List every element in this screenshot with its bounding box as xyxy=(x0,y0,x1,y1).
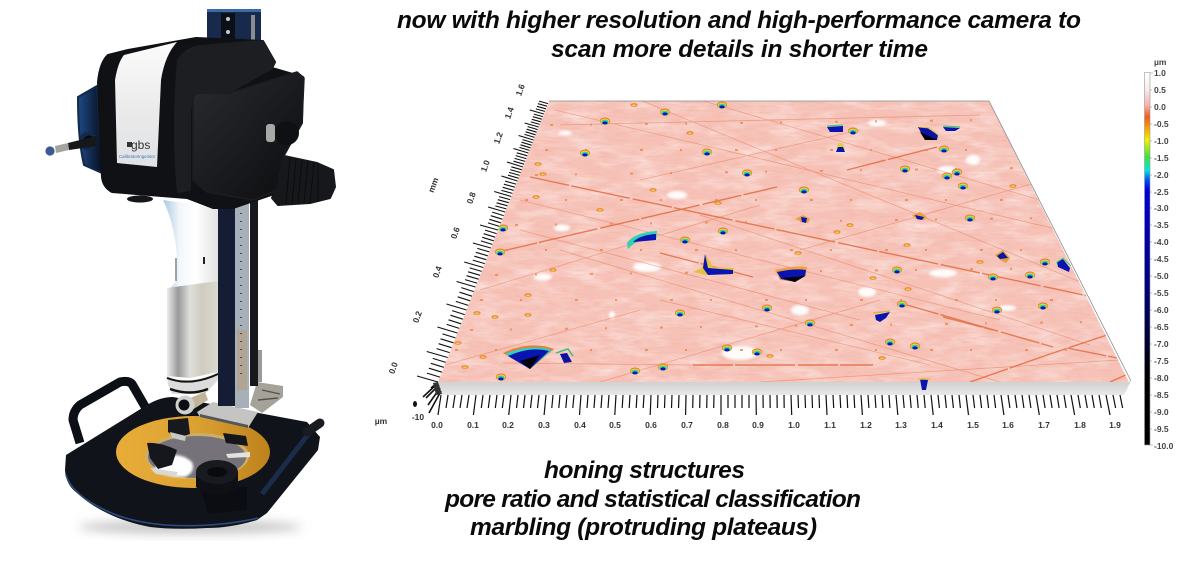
y axis labels: 0.4 xyxy=(430,264,444,279)
colour scale legend: -8.5 xyxy=(1154,390,1169,400)
title: top caption: now with higher resolution and high-performance camera to xyxy=(397,7,1081,34)
colour scale legend: -7.0 xyxy=(1154,339,1169,349)
icon: stage mechanics xyxy=(197,350,283,428)
colour scale legend: 0.0 xyxy=(1154,102,1166,112)
colour scale legend: -9.5 xyxy=(1154,424,1169,434)
icon: base plate xyxy=(65,397,320,529)
z axis xyxy=(375,382,442,426)
x axis labels: 1.2 xyxy=(860,420,872,430)
colour scale legend: -5.0 xyxy=(1154,271,1169,281)
x axis labels xyxy=(431,420,1121,430)
x axis labels: 1.9 xyxy=(1109,420,1121,430)
icon: stage knob xyxy=(196,460,247,514)
orange specks xyxy=(455,120,1100,350)
y axis labels: 0.2 xyxy=(410,309,424,324)
x axis labels: 0.4 xyxy=(574,420,586,430)
colour scale legend: -10.0 xyxy=(1154,441,1174,451)
colour scale legend: -2.5 xyxy=(1154,187,1169,197)
caption: feature list: marbling (protruding plateaus) xyxy=(470,514,817,541)
x axis labels: 1.5 xyxy=(967,420,979,430)
colour scale legend: -6.0 xyxy=(1154,305,1169,315)
height map surface xyxy=(430,100,1135,385)
y axis labels: mm xyxy=(426,176,441,194)
icon: silver cylinder xyxy=(167,281,218,394)
colour scale legend: -3.5 xyxy=(1154,220,1169,230)
icon: top column xyxy=(207,9,261,45)
colour scale legend: -9.0 xyxy=(1154,407,1169,417)
icon: right housing box xyxy=(193,72,304,200)
colour scale legend: 1.0 xyxy=(1154,68,1166,78)
caption: feature list: honing structures xyxy=(544,457,745,484)
y axis labels: 0.6 xyxy=(448,225,462,240)
colour scale legend: -5.5 xyxy=(1154,288,1169,298)
icon: white panel with logo xyxy=(115,42,177,167)
x axis labels: 0.5 xyxy=(609,420,621,430)
colour scale legend xyxy=(1144,57,1174,451)
x axis labels: 0.1 xyxy=(467,420,479,430)
icon: main housing xyxy=(98,38,303,208)
title: top caption xyxy=(397,7,1081,63)
instrument: surface measuring device xyxy=(45,9,335,534)
scratch lines xyxy=(445,100,1128,382)
y axis labels xyxy=(386,82,527,375)
y axis labels: 0.8 xyxy=(464,190,478,205)
small pores xyxy=(454,102,1050,380)
icon: column and scale xyxy=(218,200,258,408)
colour scale legend: -6.5 xyxy=(1154,322,1169,332)
icon: white panel with logo: CalibratorIngenitor xyxy=(119,154,156,159)
x axis labels: 1.8 xyxy=(1074,420,1086,430)
icon: rod on left xyxy=(45,132,97,156)
y axis labels: 1.6 xyxy=(513,82,527,97)
x axis labels: 0.0 xyxy=(431,420,443,430)
x axis labels: 1.1 xyxy=(824,420,836,430)
white plateaus xyxy=(534,120,1016,360)
side band xyxy=(438,381,1131,395)
colour scale legend: µm xyxy=(1154,57,1167,67)
colour scale legend: -1.0 xyxy=(1154,136,1169,146)
y axis ticks xyxy=(417,101,548,382)
colour scale legend: -3.0 xyxy=(1154,203,1169,213)
colour scale legend: -2.0 xyxy=(1154,170,1169,180)
y axis labels: 1.0 xyxy=(478,158,492,173)
icon: underside foot xyxy=(127,196,153,202)
icon: left blue housing xyxy=(78,86,102,173)
x axis labels: 1.0 xyxy=(788,420,800,430)
large pores xyxy=(503,125,1071,369)
colour scale legend: -0.5 xyxy=(1154,119,1169,129)
colour scale legend: -1.5 xyxy=(1154,153,1169,163)
icon: neck xyxy=(163,200,218,292)
x axis labels: 0.7 xyxy=(681,420,693,430)
colour scale legend: 0.5 xyxy=(1154,85,1166,95)
icon: carry handle xyxy=(73,381,147,443)
colour scale legend: -8.0 xyxy=(1154,373,1169,383)
x axis labels: 0.3 xyxy=(538,420,550,430)
caption: feature list: pore ratio and statistical classification xyxy=(444,486,861,513)
x axis labels: 0.6 xyxy=(645,420,657,430)
colour scale legend: -7.5 xyxy=(1154,356,1169,366)
z axis: -10 xyxy=(412,412,424,422)
y axis labels: 1.4 xyxy=(502,105,516,120)
3D surface plot xyxy=(375,82,1135,430)
icon: focus knob xyxy=(272,156,335,205)
x axis labels: 1.6 xyxy=(1002,420,1014,430)
caption: feature list xyxy=(444,457,861,541)
z axis: µm xyxy=(375,416,388,426)
x axis ticks xyxy=(438,395,1123,415)
x axis labels: 1.3 xyxy=(895,420,907,430)
colour scale legend: -4.0 xyxy=(1154,237,1169,247)
x axis labels: 1.7 xyxy=(1038,420,1050,430)
x axis labels: 0.8 xyxy=(717,420,729,430)
x axis labels: 0.9 xyxy=(752,420,764,430)
icon: small side knob xyxy=(266,121,299,145)
colour scale legend: -4.5 xyxy=(1154,254,1169,264)
x axis labels: 0.2 xyxy=(502,420,514,430)
icon: white panel with logo: gbs xyxy=(131,138,150,152)
icon: front shell xyxy=(175,41,275,192)
y axis labels: 1.2 xyxy=(491,130,505,145)
x axis labels: 1.4 xyxy=(931,420,943,430)
icon: gold ring xyxy=(116,416,270,488)
edge outline xyxy=(549,101,1131,381)
pore on edge xyxy=(918,379,930,390)
icon: objective xyxy=(176,392,208,414)
y axis labels: 0.0 xyxy=(386,360,400,375)
title: top caption: scan more details in shorter time xyxy=(551,36,928,63)
